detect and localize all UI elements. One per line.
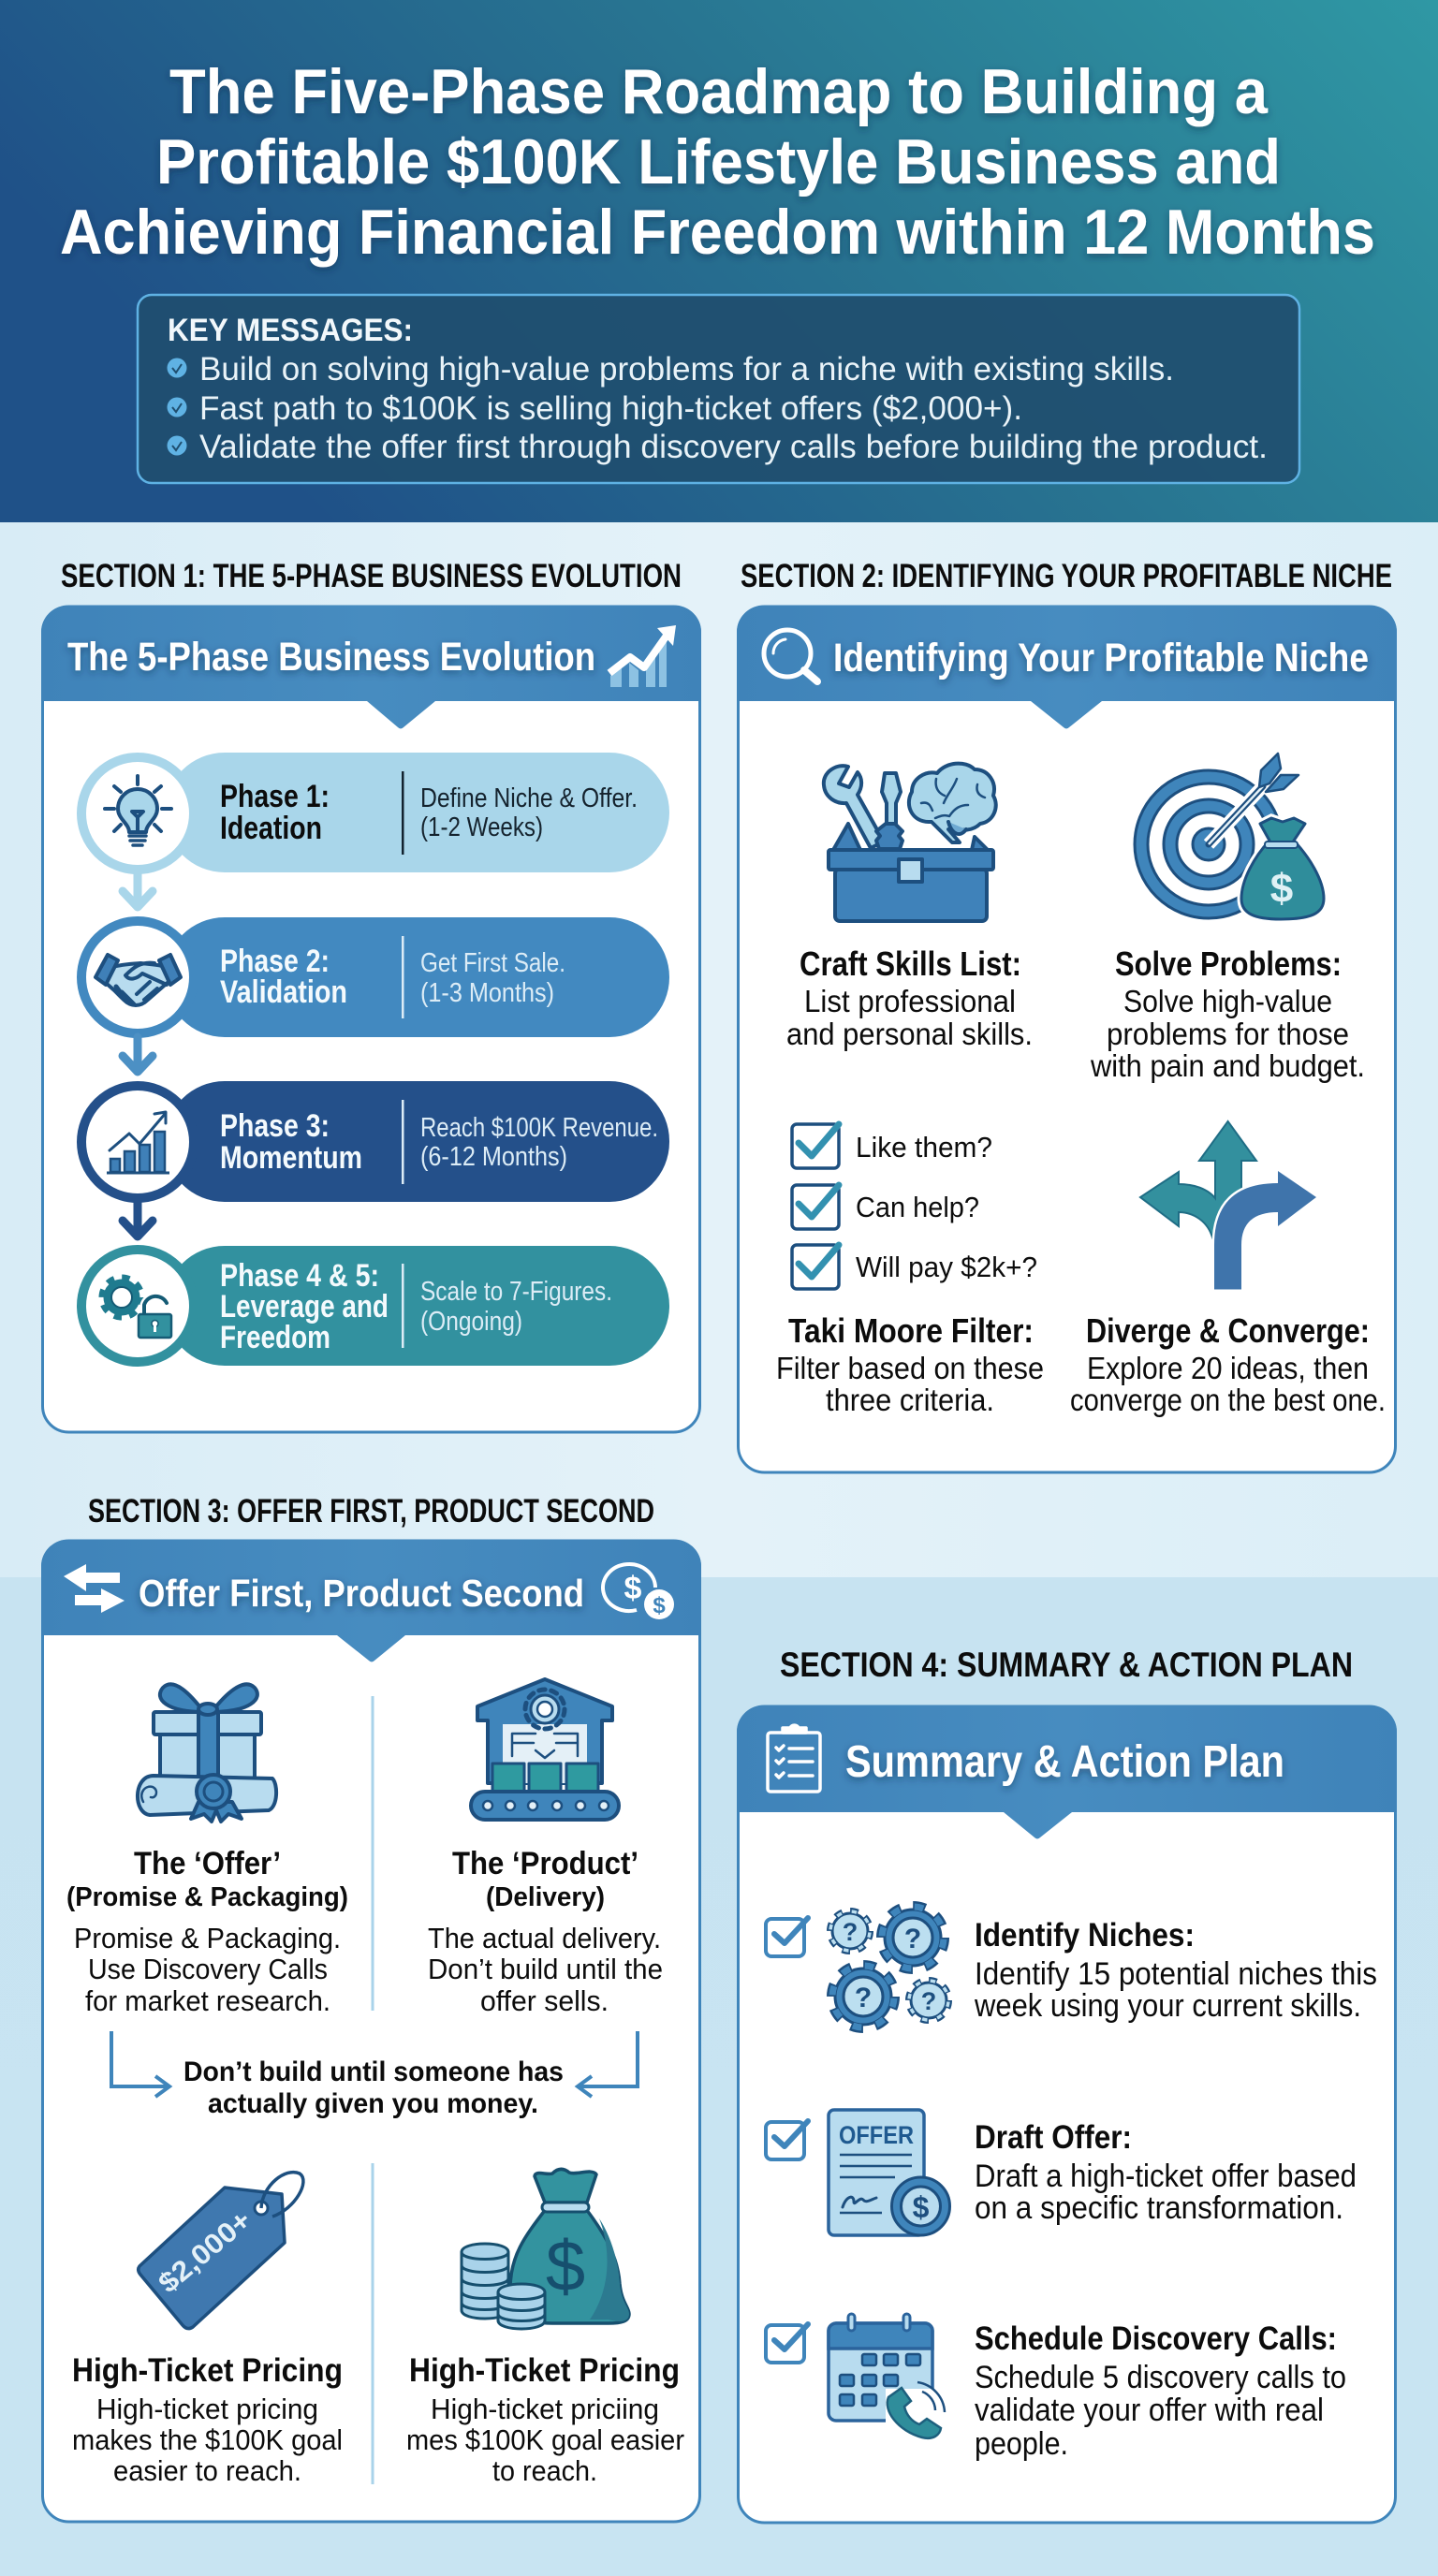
item: Taki Moore filter: three criteria. (826, 1383, 994, 1417)
callout: don't build (111, 2031, 638, 2119)
panel header: Identifying Your Profitable Niche (833, 636, 1369, 681)
section 3 heading: SECTION 3: OFFER FIRST, PRODUCT SECOND (88, 1493, 654, 1530)
phase 4 and 5: Freedom (220, 1320, 330, 1355)
arrow: left bracket (111, 2031, 169, 2097)
icon: offer document with coin: $ (913, 2190, 930, 2224)
item: diverge and converge: Explore 20 ideas, then (1087, 1351, 1369, 1385)
action: draft offer: Draft Offer: (975, 2119, 1132, 2156)
title: Achieving Financial Freedom within 12 Months (60, 197, 1375, 268)
item: solve problems: with pain and budget. (1090, 1048, 1365, 1083)
action: schedule discovery calls: validate your offer with real (975, 2393, 1324, 2428)
phase 1: Ideation (220, 811, 322, 846)
phase 4 and 5 (81, 1246, 669, 1366)
action: identify niches: week using your current skills. (974, 1988, 1361, 2024)
phase 2: Get First Sale. (420, 948, 565, 978)
action: schedule discovery calls: people. (975, 2426, 1068, 2462)
checklist: like them (792, 1124, 992, 1168)
icon: growth chart (609, 625, 676, 687)
phase 1 (81, 753, 669, 872)
item: craft skills (786, 764, 1033, 1051)
key messages box: KEY MESSAGES: (168, 313, 413, 348)
icon: target, arrow and money bag: $ (1270, 866, 1293, 912)
item: high-ticket pricing tag (72, 2173, 343, 2487)
phase 3: Phase 3: (220, 1108, 330, 1144)
panel header: Summary & Action Plan (845, 1737, 1284, 1787)
item: diverge and converge (1070, 1121, 1386, 1417)
phase 2: Phase 2: (220, 944, 330, 979)
key messages box (138, 295, 1299, 483)
action: draft offer: on a specific transformation. (975, 2190, 1343, 2226)
icon: clipboard (768, 1725, 820, 1792)
icon: money bag and coins: $ (546, 2227, 585, 2306)
arrow: phase 3 to 4 (123, 1202, 153, 1237)
item: the product: The ‘Product’ (452, 1846, 638, 1881)
item: the offer: for market research. (85, 1984, 330, 2017)
icon: factory conveyor (471, 1679, 619, 1820)
icon: calendar with phone (829, 2314, 946, 2438)
item: the product (428, 1679, 663, 2017)
page background (0, 522, 1438, 2576)
panel: 5-phase evolution (41, 606, 701, 1432)
icon: diverging arrows (1140, 1121, 1316, 1290)
icon: checkbox (766, 2324, 808, 2363)
callout: don't build: Don’t build until someone has (183, 2056, 564, 2087)
icon: question gears: ? (904, 1924, 921, 1954)
hero banner (0, 0, 1438, 522)
icon: light bulb (105, 776, 171, 845)
item: high-ticket pricing money bag: High-ticket priciing (431, 2393, 659, 2425)
phase 1: Phase 1: (220, 779, 330, 814)
item: the offer: The ‘Offer’ (134, 1846, 281, 1881)
arrow: phase 1 to 2 (123, 872, 153, 907)
panel: summary and action plan (737, 1705, 1397, 2523)
phase 3: (6-12 Months) (420, 1142, 567, 1172)
icon: question gears: ? (855, 1983, 872, 2013)
item: high-ticket pricing money bag: High-Ticket Pricing (409, 2352, 680, 2389)
item: the product: (Delivery) (486, 1882, 605, 1912)
phase 1: (1-2 Weeks) (420, 812, 543, 842)
phase 3: Momentum (220, 1140, 362, 1176)
item: solve problems: Solve high-value (1123, 984, 1332, 1018)
bullet 3: Validate the offer first through discovery calls before building the product. (199, 429, 1268, 465)
item: diverge and converge: Diverge & Converge: (1086, 1311, 1370, 1350)
phase 2 (81, 917, 669, 1037)
icon: magnifier (764, 630, 817, 681)
item: the product: The actual delivery. (428, 1922, 661, 1954)
icon: price tag (139, 2173, 303, 2329)
panel: offer first, product second (41, 1540, 701, 2522)
phase 3 (81, 1081, 669, 1202)
icon: dollar coins: $ (653, 1593, 666, 1618)
item: high-ticket pricing tag: makes the $100K goal (72, 2423, 343, 2456)
item: the product: Don’t build until the (428, 1953, 663, 1985)
item: Taki Moore filter: Taki Moore Filter: (788, 1311, 1034, 1350)
divider upper (371, 1696, 374, 2011)
item: diverge and converge: converge on the best one. (1070, 1383, 1386, 1417)
icon: checkbox (766, 2121, 808, 2159)
checklist: can help: Can help? (856, 1191, 979, 1223)
item: the offer: Use Discovery Calls (88, 1953, 328, 1985)
item: craft skills: Craft Skills List: (800, 944, 1021, 983)
title (60, 56, 1375, 268)
item: solve problems (1090, 754, 1365, 1083)
phase 4 and 5: Scale to 7-Figures. (420, 1277, 612, 1307)
phase 3: Reach $100K Revenue. (420, 1113, 658, 1143)
arrow: phase 2 to 3 (123, 1037, 153, 1072)
bullet 2: Fast path to $100K is selling high-ticket offers ($2,000+). (199, 390, 1022, 427)
divider lower (371, 2163, 374, 2484)
item: craft skills: List professional (804, 984, 1016, 1018)
action: identify niches: Identify Niches: (975, 1917, 1195, 1954)
action: schedule discovery calls (766, 2314, 1346, 2462)
phase 1: Define Niche & Offer. (420, 783, 638, 813)
panel header (41, 606, 701, 728)
panel header (41, 1540, 701, 1662)
icon: price tag: $2,000+ (153, 2204, 257, 2299)
icon: dollar coins (603, 1564, 674, 1619)
icon: gear and open lock (102, 1278, 171, 1338)
section 4 heading: SECTION 4: SUMMARY & ACTION PLAN (780, 1646, 1353, 1684)
icon: offer document with coin (829, 2110, 949, 2235)
phase 2: (1-3 Months) (420, 978, 554, 1008)
item: high-ticket pricing tag: easier to reach. (113, 2454, 301, 2487)
item: high-ticket pricing money bag: to reach. (492, 2454, 597, 2487)
panel header (737, 606, 1397, 728)
item: Taki Moore filter: Filter based on these (776, 1351, 1044, 1385)
icon: rising bar chart (107, 1112, 169, 1173)
checklist: can help (792, 1185, 979, 1229)
action: draft offer: Draft a high-ticket offer based (975, 2159, 1357, 2194)
icon: checkbox (766, 1918, 808, 1956)
item: high-ticket pricing money bag: mes $100K goal easier (406, 2423, 684, 2456)
action: identify niches (766, 1906, 1377, 2027)
item: solve problems: problems for those (1107, 1017, 1349, 1051)
panel header (737, 1705, 1397, 1838)
panel header: Offer First, Product Second (139, 1572, 584, 1615)
item: solve problems: Solve Problems: (1115, 944, 1342, 983)
icon: dollar coins: $ (624, 1571, 642, 1606)
item: the offer: Promise & Packaging. (74, 1922, 341, 1954)
icon: target, arrow and money bag (1141, 754, 1324, 919)
checklist: will pay: Will pay $2k+? (856, 1251, 1037, 1283)
title: Profitable $100K Lifestyle Business and (156, 126, 1281, 198)
action: schedule discovery calls: Schedule 5 discovery calls to (975, 2360, 1346, 2395)
icon: gift with scroll (138, 1684, 276, 1822)
phase 4 and 5: Phase 4 & 5: (220, 1258, 379, 1294)
item: high-ticket pricing money bag (406, 2169, 684, 2487)
panel header: The 5-Phase Business Evolution (67, 635, 595, 680)
icon: handshake (95, 955, 181, 1005)
action: schedule discovery calls: Schedule Discovery Calls: (975, 2320, 1337, 2357)
icon: question gears: ? (921, 1987, 936, 2015)
arrow: right bracket (578, 2031, 638, 2097)
item: the offer (66, 1684, 348, 2017)
icon: swap arrows (64, 1564, 125, 1613)
item: Taki Moore filter (776, 1124, 1044, 1417)
item: the product: offer sells. (480, 1984, 609, 2017)
phase 4 and 5: (Ongoing) (420, 1307, 522, 1337)
phase 4 and 5: Leverage and (220, 1289, 389, 1325)
phase 2: Validation (220, 974, 347, 1010)
item: high-ticket pricing tag: High-Ticket Pricing (72, 2352, 343, 2389)
action: identify niches: Identify 15 potential niches this (975, 1956, 1377, 1992)
checklist: like them: Like them? (856, 1131, 992, 1164)
callout: don't build: actually given you money. (208, 2088, 538, 2119)
checklist: will pay (792, 1245, 1037, 1289)
icon: offer document with coin: OFFER (839, 2121, 914, 2149)
icon: question gears (829, 1906, 949, 2027)
item: the offer: (Promise & Packaging) (66, 1882, 348, 1912)
icon: money bag and coins (462, 2169, 629, 2329)
section 1 heading: SECTION 1: THE 5-PHASE BUSINESS EVOLUTION (61, 558, 682, 594)
item: high-ticket pricing tag: High-ticket pricing (96, 2393, 318, 2425)
icon: question gears: ? (843, 1918, 858, 1946)
title: The Five-Phase Roadmap to Building a (169, 56, 1269, 127)
action: draft offer (766, 2110, 1357, 2235)
panel: profitable niche (737, 606, 1397, 1472)
bullet 1: Build on solving high-value problems for a niche with existing skills. (199, 351, 1174, 388)
icon: toolbox with tools and brain (824, 764, 996, 921)
item: craft skills: and personal skills. (786, 1017, 1033, 1051)
